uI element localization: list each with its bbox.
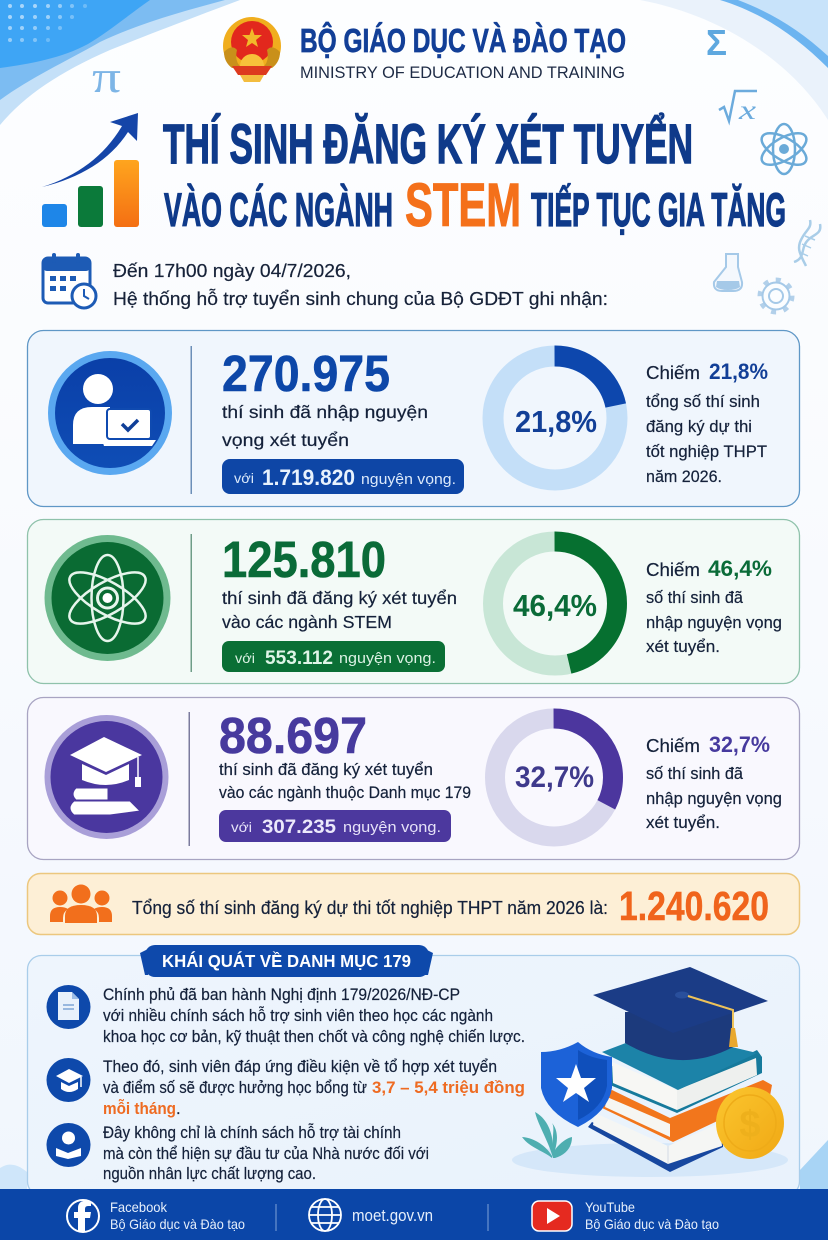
decorative math and science icons	[92, 22, 820, 312]
badge: wishes count	[222, 641, 445, 672]
description: thí sinh đã nhập nguyện	[222, 402, 428, 422]
share text: xét tuyển.	[646, 637, 720, 656]
donut chart: 46,4%: 46,4%	[513, 588, 597, 623]
text block: decree	[103, 986, 525, 1046]
share text	[646, 732, 782, 832]
icon: graduation cap	[46, 1058, 90, 1102]
share text: số thí sinh đã	[646, 588, 744, 607]
text block: scholarship: và điểm số sẽ được hưởng học bổng từ	[103, 1079, 367, 1097]
stat: 88.697: 88.697	[219, 707, 367, 764]
text block: scholarship: .	[176, 1100, 181, 1118]
middle orange book	[602, 1080, 772, 1142]
badge: wishes count: nguyện vọng.	[339, 650, 436, 667]
stat: 125.810: 125.810	[222, 531, 386, 588]
national emblem	[223, 17, 281, 82]
illustration: books, cap, shield and coin	[512, 967, 788, 1177]
Facebook label	[110, 1199, 245, 1232]
share text: nhập nguyện vọng	[646, 789, 782, 808]
total text: Tổng số thí sinh đăng ký dự thi tốt nghiệp THPT năm 2026 là:	[132, 898, 608, 918]
website label: moet.gov.vn	[352, 1206, 433, 1225]
ministry name: BỘ GIÁO DỤC VÀ ĐÀO TẠO	[300, 21, 626, 59]
badge: wishes count: với	[234, 470, 254, 486]
icon: globe	[309, 1199, 341, 1231]
panel: Decree 179 registrations	[28, 698, 800, 860]
share text: tốt nghiệp THPT	[646, 442, 767, 461]
icon: person with laptop	[48, 351, 172, 475]
donut chart: 21,8%: 21,8%	[515, 404, 597, 439]
badge: wishes count: nguyện vọng.	[361, 471, 456, 488]
text block: scholarship: 3,7 – 5,4 triệu đồng	[372, 1079, 525, 1097]
description: vọng xét tuyển	[222, 430, 349, 450]
decorative math and science icons: Σ	[706, 22, 727, 63]
bottom book	[588, 1113, 723, 1172]
icon: growth chart with arrow	[42, 113, 139, 227]
Facebook label: Facebook	[110, 1199, 168, 1215]
badge: wishes count: với	[235, 650, 255, 666]
share text: nhập nguyện vọng	[646, 613, 782, 632]
badge: wishes count	[219, 810, 451, 842]
text block: investment: mà còn thể hiện sự đầu tư của Nhà nước đối với	[103, 1145, 429, 1163]
donut chart: 32,7%: 32,7%	[515, 761, 594, 794]
heading badge: KHÁI QUÁT VỀ DANH MỤC 179	[162, 950, 411, 971]
share text: 46,4%	[708, 556, 772, 581]
title: STEM	[405, 171, 521, 239]
mortarboard cap	[593, 967, 768, 1060]
gold coin	[716, 1087, 784, 1159]
icon: person reading	[46, 1123, 90, 1167]
donut chart: 21,8%	[493, 356, 617, 480]
divider	[190, 534, 192, 672]
share text: tổng số thí sinh	[646, 392, 760, 411]
icon: calendar with clock	[43, 253, 96, 308]
description	[219, 761, 471, 802]
description	[222, 402, 428, 450]
badge: wishes count: 553.112	[265, 648, 333, 669]
text block: investment	[103, 1123, 429, 1183]
share text: Chiếm	[646, 363, 700, 383]
decorative math and science icons: π	[92, 51, 121, 102]
description: thí sinh đã đăng ký xét tuyển	[222, 588, 457, 608]
ministry name: MINISTRY OF EDUCATION AND TRAINING	[300, 63, 625, 82]
text block: decree: khoa học cơ bản, kỹ thuật then chốt và công nghệ chiến lược.	[103, 1028, 525, 1046]
stat: 270.975: 270.975	[222, 345, 390, 402]
badge: wishes count: 307.235	[262, 817, 336, 838]
YouTube label: Bộ Giáo dục và Đào tạo	[585, 1216, 719, 1232]
share text: 21,8%	[709, 359, 768, 384]
intro text: Hệ thống hỗ trợ tuyển sinh chung của Bộ GDĐT ghi nhận:	[113, 288, 608, 309]
badge: wishes count: nguyện vọng.	[343, 819, 441, 836]
donut chart: 32,7%	[495, 718, 613, 836]
Facebook label: Bộ Giáo dục và Đào tạo	[110, 1216, 245, 1232]
icon: group of people	[50, 884, 112, 923]
text block: investment: nguồn nhân lực chất lượng cao.	[103, 1165, 316, 1183]
description: thí sinh đã đăng ký xét tuyển	[219, 761, 433, 779]
icon: YouTube	[532, 1201, 572, 1231]
top teal book	[602, 1030, 762, 1113]
divider	[188, 712, 190, 846]
plant	[522, 1112, 572, 1158]
icon: atom	[44, 535, 170, 661]
title: VÀO CÁC NGÀNH	[164, 183, 393, 236]
text block: investment: Đây không chỉ là chính sách hỗ trợ tài chính	[103, 1123, 401, 1142]
text block: decree: với nhiều chính sách hỗ trợ sinh viên theo học các ngành	[103, 1006, 493, 1025]
shield with star	[541, 1042, 612, 1127]
donut chart: 46,4%	[493, 542, 617, 666]
text block: scholarship: mỗi tháng	[103, 1099, 176, 1118]
total number: 1.240.620	[619, 883, 769, 929]
heading badge	[140, 945, 433, 977]
gold coin: $	[739, 1104, 761, 1146]
YouTube label	[585, 1199, 719, 1232]
share text: năm 2026.	[646, 467, 722, 486]
panel: STEM registrations	[28, 520, 800, 684]
YouTube label: YouTube	[585, 1199, 635, 1215]
icon: Facebook	[67, 1200, 99, 1232]
intro text	[113, 261, 608, 309]
share text: 32,7%	[709, 732, 770, 757]
text block: decree: Chính phủ đã ban hành Nghị định 179/2026/NĐ-CP	[103, 986, 460, 1004]
icon: graduation cap and books	[44, 715, 168, 839]
description	[222, 588, 457, 632]
description: vào các ngành thuộc Danh mục 179	[219, 784, 471, 802]
panel: registered candidates	[28, 330, 800, 506]
share text: Chiếm	[646, 560, 700, 580]
share text: xét tuyển.	[646, 813, 720, 832]
share text	[646, 359, 768, 486]
badge: wishes count: 1.719.820	[262, 465, 355, 490]
description: vào các ngành STEM	[222, 612, 392, 632]
divider	[190, 346, 192, 494]
footer	[0, 1189, 828, 1240]
text block: scholarship: Theo đó, sinh viên đáp ứng điều kiện về tổ hợp xét tuyển	[103, 1058, 497, 1076]
badge: wishes count: với	[231, 819, 252, 835]
share text	[646, 556, 782, 656]
ministry name	[300, 21, 626, 82]
text block: scholarship	[103, 1058, 525, 1118]
share text: đăng ký dự thi	[646, 417, 752, 436]
badge: wishes count	[222, 459, 464, 494]
decorative math and science icons: x	[738, 95, 756, 125]
intro text: Đến 17h00 ngày 04/7/2026,	[113, 261, 351, 281]
panel: overview of list 179	[28, 945, 800, 1196]
panel: total candidates banner	[28, 874, 800, 934]
title	[163, 112, 786, 239]
icon: document	[46, 985, 90, 1029]
share text: số thí sinh đã	[646, 764, 744, 783]
share text: Chiếm	[646, 736, 700, 756]
